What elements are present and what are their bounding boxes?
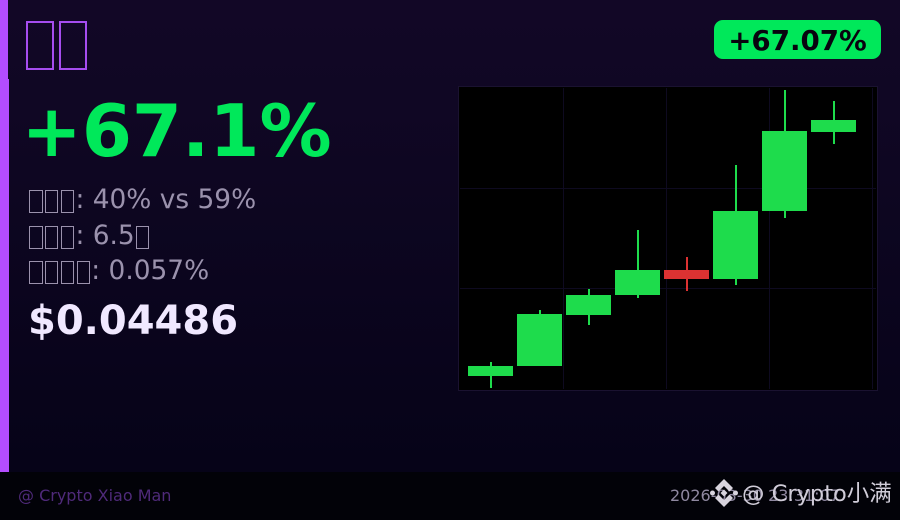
chart panel (458, 86, 878, 390)
stat: rate (29, 255, 209, 286)
change badge: +67.07% (728, 24, 867, 57)
accent bar (0, 0, 9, 472)
candlestick chart (458, 86, 878, 391)
footer timestamp: 2026-03-30 23:31:07 (670, 486, 840, 505)
candle 2 (517, 310, 562, 366)
stat: volume: : 6.5 (75, 220, 135, 251)
hero percentage: +67.1% (22, 89, 332, 173)
candle 4 (615, 230, 660, 298)
title (26, 21, 87, 70)
candle 1 (468, 362, 513, 388)
candle 5 (664, 257, 709, 291)
candle 7 (762, 90, 807, 218)
candle 8 (811, 101, 856, 144)
watermark: @ Crypto小满 (742, 481, 892, 507)
footer handle: @ Crypto Xiao Man (18, 486, 171, 505)
stat: ratio: : 40% vs 59% (75, 184, 256, 215)
footer bar (0, 472, 900, 520)
stat: volume (29, 220, 149, 251)
icon: exchange logo (710, 479, 738, 507)
stats block (29, 184, 256, 286)
price: $0.04486 (28, 298, 238, 344)
candle 3 (566, 289, 611, 325)
candle 6 (713, 165, 758, 285)
stat: rate: : 0.057% (91, 255, 209, 286)
